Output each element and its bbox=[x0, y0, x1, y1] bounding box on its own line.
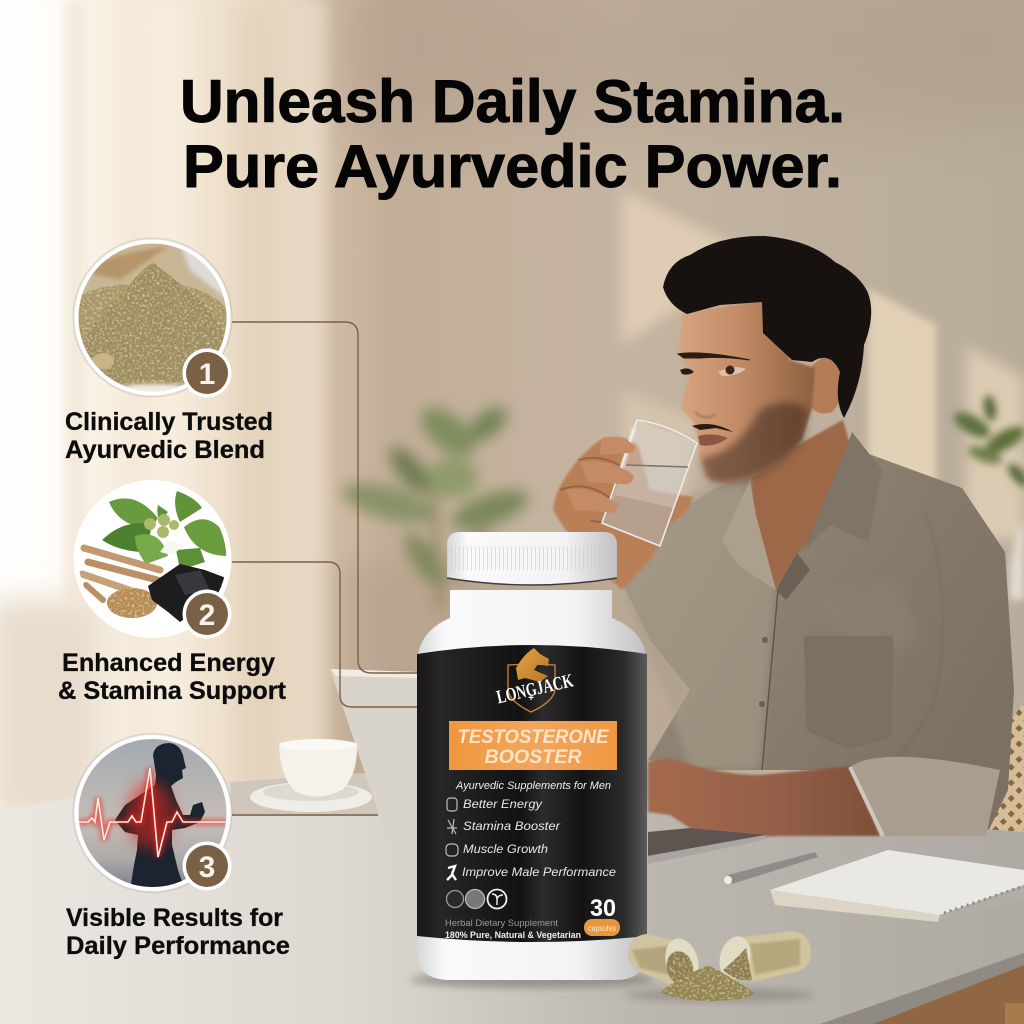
capsules pill: capsules bbox=[588, 924, 616, 933]
man: face bbox=[678, 300, 815, 483]
right capsule bbox=[715, 931, 811, 983]
benefit icons bbox=[446, 798, 458, 880]
feature 1 bbox=[65, 238, 273, 464]
product name: TESTOSTERONE bbox=[458, 727, 610, 748]
benefit list: Muscle Growth bbox=[463, 842, 548, 856]
bottle shadow bbox=[410, 972, 654, 988]
feature 3 caption: Daily Performance bbox=[66, 932, 290, 960]
feature 2 caption bbox=[58, 649, 287, 705]
connector line 3 bbox=[232, 814, 378, 816]
purity line: 180% Pure, Natural & Vegetarian bbox=[445, 930, 581, 940]
left capsule bbox=[628, 934, 704, 989]
man: raised hand and wrist bbox=[553, 437, 693, 590]
certification badges bbox=[446, 890, 506, 908]
logo plus: + bbox=[528, 693, 534, 704]
coffee cup and saucer bbox=[250, 739, 372, 812]
logo wordmark: LONGJACK bbox=[495, 670, 576, 708]
bottle neck and body bbox=[417, 590, 647, 980]
product name bbox=[458, 727, 610, 768]
bottle cap bbox=[447, 532, 617, 585]
table rear shaded band bbox=[230, 772, 420, 816]
feature 1 number badge: 1 bbox=[199, 358, 215, 391]
feature 3 caption: Visible Results for bbox=[66, 904, 283, 932]
man: hair bbox=[663, 236, 871, 418]
logo horse bbox=[516, 648, 549, 682]
powder pile bbox=[660, 965, 755, 1001]
connector line 2 bbox=[232, 562, 418, 707]
glass of water bbox=[602, 420, 697, 546]
feature 3 image circle bbox=[74, 734, 232, 892]
notebook bbox=[770, 850, 1024, 922]
product bottle bbox=[410, 532, 654, 988]
capsules pill bbox=[584, 919, 620, 936]
benefit list: Improve Male Performance bbox=[462, 865, 616, 879]
table edge and wood bbox=[820, 953, 1024, 1024]
laptop back screen bbox=[330, 669, 418, 842]
product subtitle: Ayurvedic Supplements for Men bbox=[455, 780, 611, 792]
product name: BOOSTER bbox=[484, 747, 582, 768]
logo shield bbox=[508, 664, 555, 712]
orange banner bbox=[449, 721, 617, 770]
capsule count: 30 bbox=[590, 895, 616, 922]
feature 1 image circle bbox=[74, 238, 232, 398]
feature 2 image circle bbox=[74, 480, 232, 638]
feature 2 caption: & Stamina Support bbox=[58, 677, 287, 705]
benefit list: Better Energy bbox=[463, 797, 543, 811]
benefit list: Stamina Booster bbox=[463, 819, 561, 833]
background plant centre bbox=[337, 398, 533, 610]
feature 1 caption bbox=[65, 408, 273, 464]
feature 1 number badge bbox=[182, 348, 232, 398]
man: forearm and hand on laptop bbox=[648, 757, 1000, 837]
laptop base bbox=[648, 828, 766, 864]
title bbox=[180, 68, 845, 200]
feature 3 caption bbox=[66, 904, 290, 960]
man: ear bbox=[812, 356, 845, 413]
table top bbox=[0, 772, 1024, 1024]
feature 1 caption: Ayurvedic Blend bbox=[65, 436, 265, 464]
title: Pure Ayurvedic Power. bbox=[183, 133, 842, 200]
feature 2 number badge bbox=[182, 590, 232, 638]
title: Unleash Daily Stamina. bbox=[180, 68, 845, 135]
background plant right bbox=[950, 394, 1024, 600]
supplement line: Herbal Dietary Supplement bbox=[445, 918, 558, 929]
man: fingers on glass bbox=[566, 437, 635, 513]
feature 3 number badge: 3 bbox=[199, 851, 215, 884]
feature 2 number badge: 2 bbox=[199, 599, 215, 632]
feature 3 number badge bbox=[182, 842, 232, 890]
man: neck bbox=[752, 420, 852, 590]
pen bbox=[724, 852, 818, 884]
black label bbox=[417, 645, 647, 942]
feature 3 bbox=[66, 734, 290, 960]
man: shirt and torso bbox=[616, 432, 1014, 836]
benefit list bbox=[462, 797, 616, 879]
connector line 1 bbox=[232, 322, 418, 673]
open capsules with powder bbox=[625, 931, 815, 1002]
man: collar bbox=[722, 432, 882, 600]
feature 1 caption: Clinically Trusted bbox=[65, 408, 273, 436]
chair bbox=[986, 702, 1024, 845]
feature 2 caption: Enhanced Energy bbox=[62, 649, 275, 677]
feature 2 bbox=[58, 480, 287, 705]
